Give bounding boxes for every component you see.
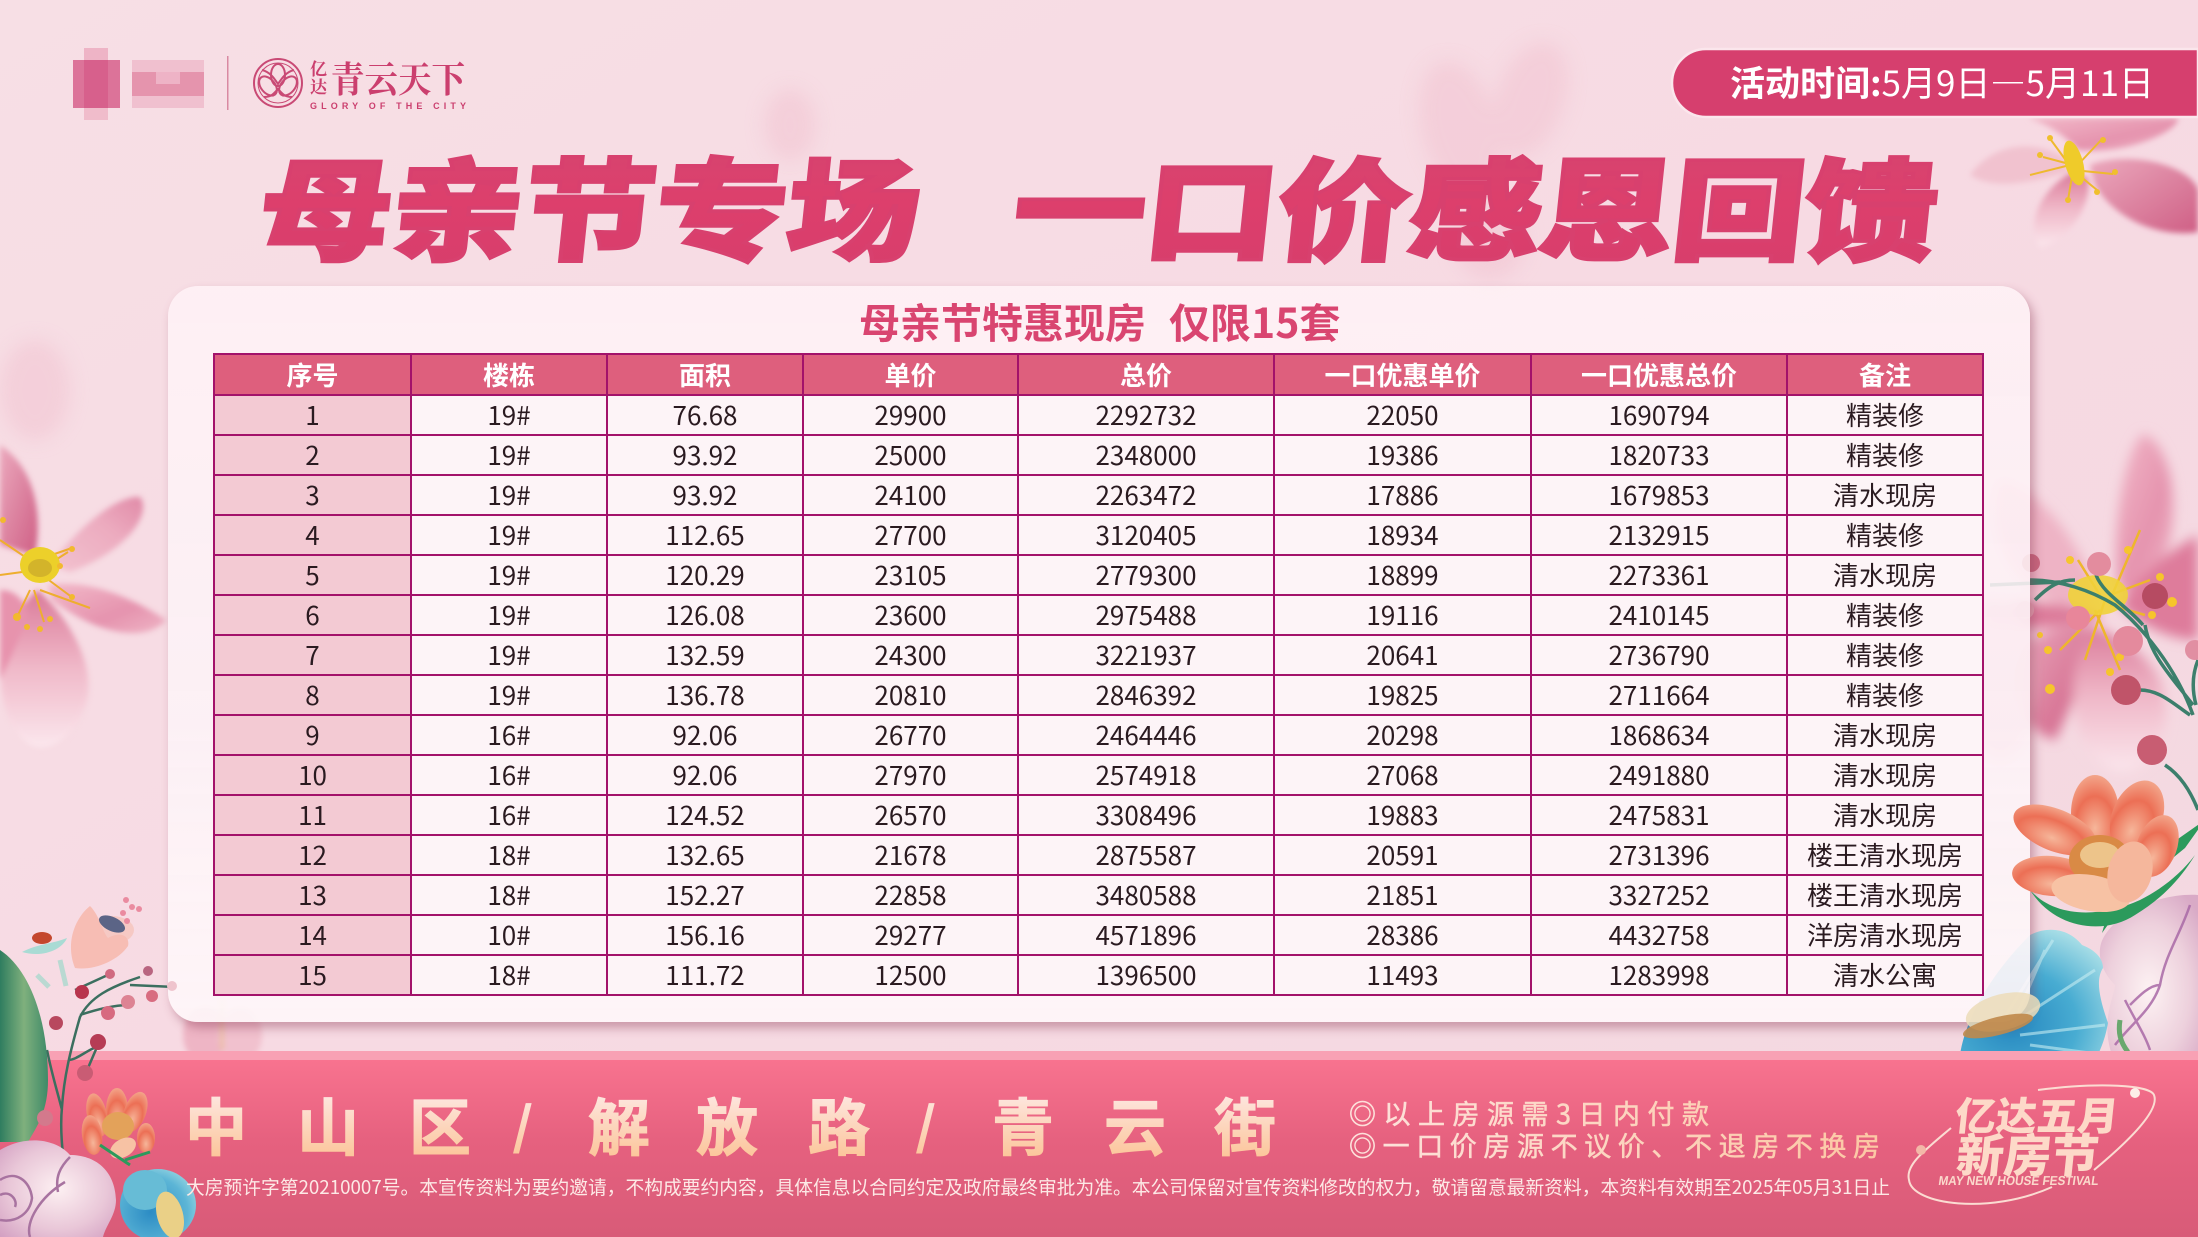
table body rows: 2975488 xyxy=(1095,596,1196,633)
footer address text: 青云街 xyxy=(992,1078,1276,1168)
table body rows: 7 xyxy=(305,636,320,673)
pink title xyxy=(253,124,1946,284)
table body rows: 27700 xyxy=(874,516,947,553)
footer disclaimer: 大房预许字第20210007号。本宣传资料为要约邀请，不构成要约内容，具体信息以合同约定及政府最终审批为准。本公司保留对宣传资料修改的权力，敬请留意最新资料，本资料有效期至2025年05月31日止 xyxy=(186,1173,1890,1200)
festival logo xyxy=(1908,1085,2155,1204)
table body rows: 19# xyxy=(487,556,531,593)
table body rows: 24300 xyxy=(874,636,947,673)
table body rows: 156.16 xyxy=(665,916,745,953)
pixelated partner logo xyxy=(73,48,204,120)
project name: 青云天下 xyxy=(331,52,466,103)
table body rows: 19386 xyxy=(1366,436,1439,473)
developer logos xyxy=(73,48,466,120)
table body rows: 10# xyxy=(487,916,531,953)
table body rows: 20810 xyxy=(874,676,947,713)
table body rows: 11493 xyxy=(1366,956,1439,993)
table header row: 楼栋 xyxy=(483,356,535,392)
flower: coral right xyxy=(2006,772,2198,933)
table body rows: 18# xyxy=(487,956,531,993)
table body rows: 2263472 xyxy=(1095,476,1196,513)
flower: top right pink blossom xyxy=(1970,118,2198,247)
flower centre: blue right beige seed head xyxy=(1961,985,2044,1043)
table body rows: 2875587 xyxy=(1095,836,1196,873)
table body rows: 1 xyxy=(305,396,320,433)
table body rows: 12 xyxy=(298,836,327,873)
footer notes: ◎一口价房源不议价、不退房不换房 xyxy=(1349,1125,1880,1164)
pink title: 一口价感恩回馈 xyxy=(1007,124,1946,284)
table body rows: 132.65 xyxy=(665,836,745,873)
table body rows: 清水现房 xyxy=(1833,796,1937,833)
flower: pale rose right xyxy=(2100,895,2198,1055)
project name: 亿 xyxy=(310,55,327,80)
flower: right pink blossom behind panel xyxy=(1965,434,2198,810)
price table xyxy=(213,353,1984,996)
table body rows: 92.06 xyxy=(673,716,737,753)
footer address text: 解放路 xyxy=(588,1078,870,1168)
table body rows: 19# xyxy=(487,396,531,433)
table body rows: 2779300 xyxy=(1095,556,1196,593)
table body rows: 2574918 xyxy=(1095,756,1196,793)
project emblem xyxy=(254,59,302,107)
table body rows: 2292732 xyxy=(1095,396,1196,433)
flower: blue left xyxy=(120,1169,196,1237)
table body rows: 126.08 xyxy=(665,596,745,633)
table body rows: 19116 xyxy=(1366,596,1439,633)
table body rows: 2348000 xyxy=(1095,436,1196,473)
table body rows: 5 xyxy=(305,556,320,593)
table body rows: 1396500 xyxy=(1095,956,1196,993)
table body rows: 2410145 xyxy=(1608,596,1710,633)
table body rows: 清水现房 xyxy=(1833,716,1937,753)
table body rows: 3308496 xyxy=(1095,796,1196,833)
flower: rose left xyxy=(0,1140,116,1237)
table body rows: 21678 xyxy=(874,836,947,873)
table body rows: 2475831 xyxy=(1608,796,1710,833)
table body rows: 92.06 xyxy=(673,756,737,793)
table body rows: 19# xyxy=(487,516,531,553)
table body rows: 19# xyxy=(487,436,531,473)
table body rows: 楼王清水现房 xyxy=(1807,836,1963,873)
table body rows: 3 xyxy=(305,476,320,513)
table body rows: 20591 xyxy=(1366,836,1439,873)
table body rows: 6 xyxy=(305,596,320,633)
flower: pale blossom under panel bottom-left xyxy=(183,1000,262,1063)
table body rows: 19# xyxy=(487,676,531,713)
table header row: 总价 xyxy=(1120,356,1172,392)
table body rows: 21851 xyxy=(1366,876,1439,913)
flower: coral left xyxy=(79,1088,155,1165)
table body rows: 124.52 xyxy=(665,796,745,833)
table body rows: 22858 xyxy=(874,876,947,913)
table body rows xyxy=(215,396,1963,994)
footer address text: / xyxy=(513,1087,532,1159)
table body rows: 4432758 xyxy=(1608,916,1710,953)
table body rows: 2711664 xyxy=(1608,676,1710,713)
table body rows: 19825 xyxy=(1366,676,1439,713)
table body rows: 3327252 xyxy=(1608,876,1710,913)
table header row: 序号 xyxy=(286,356,338,392)
table body rows: 19# xyxy=(487,596,531,633)
table header row: 备注 xyxy=(1859,356,1911,392)
table body rows: 111.72 xyxy=(665,956,745,993)
table body rows: 19# xyxy=(487,636,531,673)
footer notes xyxy=(1349,1093,1880,1164)
berries xyxy=(37,966,177,1126)
table body rows: 112.65 xyxy=(665,516,745,553)
festival logo: 亿达五月 xyxy=(1953,1086,2122,1142)
faint background petals xyxy=(0,32,1582,440)
table body rows: 24100 xyxy=(874,476,947,513)
table header row xyxy=(215,355,1982,394)
table body rows: 19# xyxy=(487,476,531,513)
table body rows: 76.68 xyxy=(673,396,737,433)
table body rows: 清水现房 xyxy=(1833,556,1937,593)
table body rows: 3120405 xyxy=(1095,516,1196,553)
table body rows: 20641 xyxy=(1366,636,1439,673)
table header row: 一口优惠总价 xyxy=(1581,356,1737,392)
table body rows: 11 xyxy=(298,796,327,833)
table body rows: 27970 xyxy=(874,756,947,793)
footer address text: / xyxy=(916,1087,935,1159)
table body rows: 29900 xyxy=(874,396,947,433)
table body rows: 18# xyxy=(487,876,531,913)
table header row: 单价 xyxy=(884,356,936,392)
table body rows: 楼王清水现房 xyxy=(1807,876,1963,913)
table body rows: 22050 xyxy=(1366,396,1439,433)
table body rows: 精装修 xyxy=(1846,676,1924,713)
activity date pill: 活动时间:5月9日—5月11日 xyxy=(1730,56,2154,107)
panel: white card behind table xyxy=(168,286,2030,1022)
flowers: lower left cluster xyxy=(0,897,196,1237)
table body rows: 23600 xyxy=(874,596,947,633)
table body rows: 93.92 xyxy=(673,436,737,473)
pink title: 母亲节专场 xyxy=(253,124,929,284)
table body rows: 1690794 xyxy=(1608,396,1710,433)
flower: left pink blossom xyxy=(0,445,166,748)
flower: blue right xyxy=(1960,930,2108,1055)
table body rows: 132.59 xyxy=(665,636,745,673)
table body rows: 洋房清水现房 xyxy=(1807,916,1963,953)
table body rows: 120.29 xyxy=(665,556,745,593)
flower: small tulip xyxy=(22,897,142,987)
table header row: 一口优惠单价 xyxy=(1324,356,1480,392)
table body rows: 19883 xyxy=(1366,796,1439,833)
table body rows: 1868634 xyxy=(1608,716,1710,753)
table body rows: 1283998 xyxy=(1608,956,1710,993)
project name: 达 xyxy=(310,73,328,98)
berry stems xyxy=(47,974,175,1237)
table header row: 面积 xyxy=(679,356,731,392)
table body rows: 152.27 xyxy=(665,876,745,913)
table body rows: 10 xyxy=(298,756,327,793)
table body rows: 精装修 xyxy=(1846,516,1924,553)
activity date pill xyxy=(1672,49,2198,117)
table body rows: 精装修 xyxy=(1846,396,1924,433)
table body rows: 2846392 xyxy=(1095,676,1196,713)
table body rows: 12500 xyxy=(874,956,947,993)
table body rows: 4571896 xyxy=(1095,916,1196,953)
table body rows: 17886 xyxy=(1366,476,1439,513)
green leaf xyxy=(0,950,48,1142)
table body rows: 清水现房 xyxy=(1833,476,1937,513)
table body rows: 2731396 xyxy=(1608,836,1710,873)
table body rows: 28386 xyxy=(1366,916,1439,953)
table body rows: 136.78 xyxy=(665,676,745,713)
table body rows: 1679853 xyxy=(1608,476,1710,513)
table body rows: 18# xyxy=(487,836,531,873)
footer address text: 中山区 xyxy=(185,1078,471,1168)
table body rows: 清水公寓 xyxy=(1833,956,1937,993)
festival logo: MAY NEW HOUSE FESTIVAL xyxy=(1938,1173,2100,1188)
table body rows: 20298 xyxy=(1366,716,1439,753)
table body rows: 2132915 xyxy=(1608,516,1710,553)
table body rows: 26770 xyxy=(874,716,947,753)
footer address text xyxy=(185,1078,1276,1168)
table body rows: 23105 xyxy=(874,556,947,593)
table body rows: 26570 xyxy=(874,796,947,833)
table body rows: 93.92 xyxy=(673,476,737,513)
table body rows: 8 xyxy=(305,676,320,713)
festival logo: 新房节 xyxy=(1954,1120,2102,1186)
table body rows: 2464446 xyxy=(1095,716,1196,753)
table body rows: 4 xyxy=(305,516,320,553)
table body rows: 精装修 xyxy=(1846,636,1924,673)
table body rows: 1820733 xyxy=(1608,436,1710,473)
table body rows: 27068 xyxy=(1366,756,1439,793)
table body rows: 29277 xyxy=(874,916,947,953)
table body rows: 2491880 xyxy=(1608,756,1710,793)
table body rows: 清水现房 xyxy=(1833,756,1937,793)
table body rows: 2 xyxy=(305,436,320,473)
project name: GLORY OF THE CITY xyxy=(310,101,466,111)
footer notes: ◎以上房源需3日内付款 xyxy=(1349,1093,1709,1132)
table body rows: 16# xyxy=(487,756,531,793)
table body rows: 3221937 xyxy=(1095,636,1196,673)
table body rows: 2736790 xyxy=(1608,636,1710,673)
table body rows: 14 xyxy=(298,916,327,953)
table body rows: 18899 xyxy=(1366,556,1439,593)
table body rows: 18934 xyxy=(1366,516,1439,553)
table body rows: 16# xyxy=(487,716,531,753)
table body rows: 13 xyxy=(298,876,327,913)
table body rows: 精装修 xyxy=(1846,436,1924,473)
table body rows: 9 xyxy=(305,716,320,753)
table body rows: 15 xyxy=(298,956,327,993)
table body rows: 16# xyxy=(487,796,531,833)
table body rows: 精装修 xyxy=(1846,596,1924,633)
table body rows: 25000 xyxy=(874,436,947,473)
table body rows: 3480588 xyxy=(1095,876,1196,913)
table body rows: 2273361 xyxy=(1608,556,1710,593)
table subtitle: 母亲节特惠现房 仅限15套 xyxy=(859,290,1340,350)
footer band xyxy=(0,1051,2198,1237)
